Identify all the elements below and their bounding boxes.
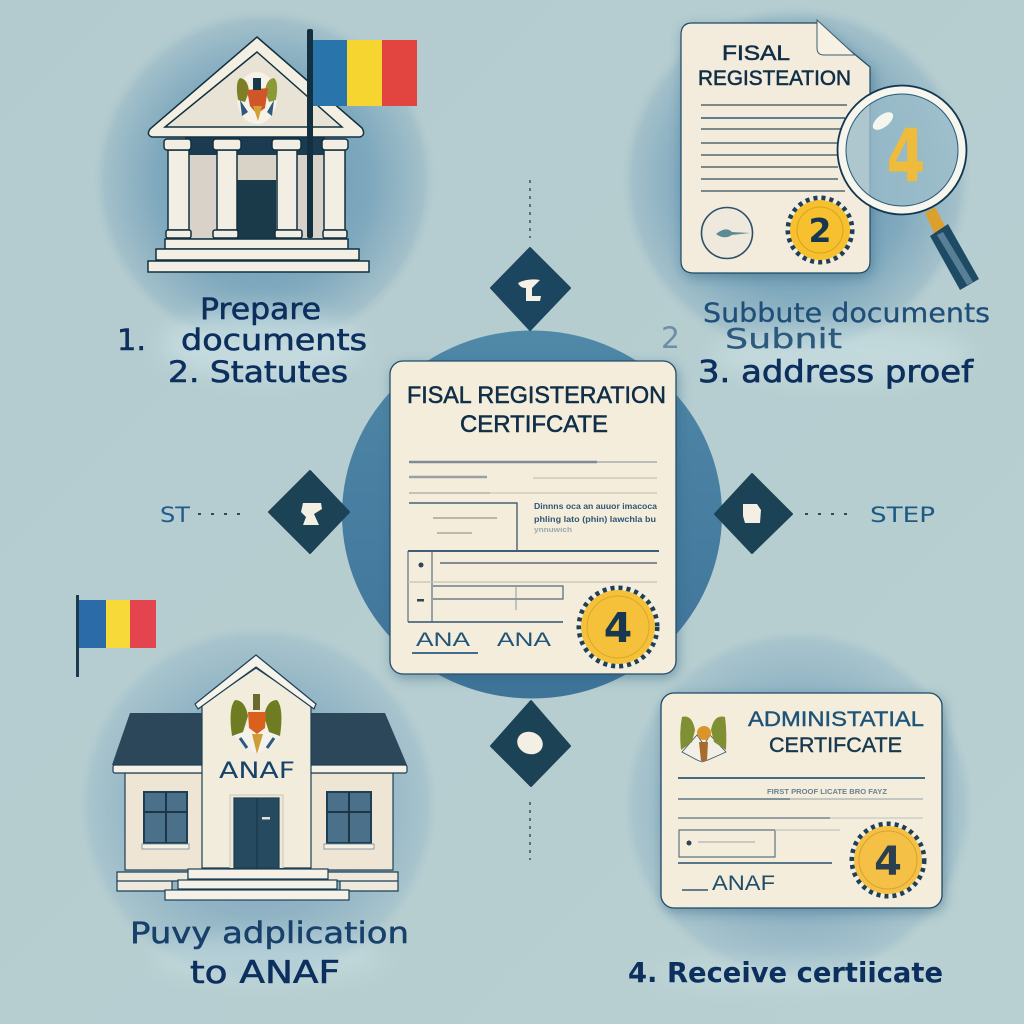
left eave bbox=[113, 765, 203, 773]
building sign: ANAF bbox=[219, 759, 295, 784]
seal: number 2: 2 bbox=[809, 211, 831, 250]
label: step 1: 2. Statutes bbox=[168, 355, 348, 389]
form marker bbox=[686, 840, 692, 846]
connector: top dashed bbox=[529, 180, 531, 238]
stamp circle bbox=[702, 208, 752, 258]
side plinths bbox=[117, 872, 398, 891]
diamond: right step bbox=[715, 474, 792, 553]
diamond: top step bbox=[491, 248, 570, 330]
right window bbox=[324, 792, 374, 849]
label: step 1: 1. bbox=[117, 323, 146, 357]
label: step 2: 3. address proef bbox=[698, 355, 975, 390]
text glow: step 1 bbox=[162, 311, 362, 379]
fine print: FIRST PROOF LICATE BRO FAYZ bbox=[767, 789, 888, 796]
form markers bbox=[417, 562, 424, 602]
panel: step 4 administrative certificate bbox=[661, 693, 942, 908]
document title bbox=[698, 42, 851, 90]
signature 1: ANA bbox=[416, 630, 470, 651]
card title: ADMINISTATIAL bbox=[748, 708, 924, 731]
icon: magnifying glass bbox=[838, 86, 979, 290]
flag: step 1 bbox=[307, 29, 417, 238]
label: step 1: documents bbox=[181, 323, 367, 357]
central block bbox=[202, 668, 311, 868]
panel: step 3 ANAF building bbox=[112, 655, 407, 900]
left roof bbox=[112, 713, 202, 765]
document title: FISAL bbox=[722, 42, 790, 65]
diamond: left step bbox=[269, 471, 349, 553]
seal: number 4: 4 bbox=[604, 604, 632, 652]
connector: left dashed bbox=[198, 513, 250, 515]
card bbox=[661, 693, 942, 908]
label: step 3 bbox=[130, 916, 409, 991]
fine print: Dinnns oca an auuor imacoca bbox=[534, 501, 657, 511]
certificate sheet bbox=[390, 361, 676, 674]
page fold bbox=[817, 20, 855, 55]
left window bbox=[142, 792, 189, 849]
magnifier lens bbox=[842, 90, 962, 210]
label: ST: ST bbox=[160, 503, 190, 527]
column 4 bbox=[322, 139, 348, 238]
certificate title bbox=[407, 382, 666, 438]
emblem: coat of arms bbox=[680, 717, 726, 762]
label: step 2: Subnit bbox=[725, 322, 842, 355]
certificate form lines bbox=[408, 462, 659, 653]
seal: number 2 bbox=[788, 198, 852, 262]
door lintel bbox=[237, 155, 276, 180]
column 1 bbox=[164, 139, 191, 238]
document lines bbox=[701, 105, 847, 191]
card title: CERTIFCATE bbox=[769, 734, 902, 757]
pediment inner bbox=[165, 52, 342, 127]
label: step 1: Prepare bbox=[200, 292, 321, 326]
text glow: step 2 bbox=[710, 327, 970, 383]
right eave bbox=[310, 765, 407, 773]
step 4 halo bbox=[622, 629, 974, 981]
panel: step 1 government building bbox=[148, 37, 369, 272]
text glow: step 4 bbox=[650, 961, 930, 989]
lens rim bbox=[838, 86, 966, 214]
back wall bbox=[189, 137, 324, 238]
document sheet bbox=[681, 23, 870, 273]
right roof bbox=[311, 713, 407, 765]
flag: step 3 bbox=[76, 595, 156, 677]
lens highlight bbox=[870, 109, 896, 133]
emblem: pediment coat of arms bbox=[237, 72, 277, 124]
step 3 halo bbox=[78, 625, 438, 985]
label: step 2: 2 bbox=[661, 321, 680, 355]
connector: right dashed bbox=[805, 513, 852, 515]
dark frieze bbox=[185, 137, 325, 155]
seal: number 4: 4 bbox=[874, 839, 902, 885]
panel: central certificate bbox=[390, 361, 676, 674]
emblem: coat of arms bbox=[231, 694, 281, 754]
connector: bottom dashed bbox=[529, 802, 531, 860]
signature: ANAF bbox=[712, 872, 775, 895]
diamond: bottom step bbox=[491, 701, 570, 786]
card form lines bbox=[678, 778, 925, 890]
document title: REGISTEATION bbox=[698, 67, 851, 90]
side walls bbox=[125, 773, 393, 870]
text glow: step 3 bbox=[153, 934, 383, 982]
magnifier handle bbox=[925, 207, 979, 290]
signature 2: ANA bbox=[497, 630, 551, 651]
door bbox=[230, 795, 283, 868]
fine print: phling lato (phin) lawchla bu bbox=[534, 514, 656, 524]
column 3 bbox=[272, 139, 302, 238]
steps bbox=[148, 239, 369, 272]
lens number: 4 bbox=[887, 115, 925, 199]
label: step 3: Puvy adplication bbox=[130, 916, 409, 950]
seal: number 4 bbox=[852, 824, 924, 896]
label: step 3: to ANAF bbox=[190, 955, 340, 991]
step 2 halo bbox=[620, 4, 972, 356]
label: step 4: 4. Receive certiicate bbox=[628, 956, 943, 989]
label: step 2: Subbute documents bbox=[703, 298, 990, 329]
gable roof trim bbox=[195, 655, 316, 709]
column 2 bbox=[213, 139, 241, 238]
lens inner rim bbox=[846, 94, 958, 206]
step 1 halo bbox=[92, 8, 436, 352]
fine print bbox=[534, 501, 657, 534]
label: step 1 bbox=[117, 292, 367, 389]
certificate title: CERTIFCATE bbox=[460, 411, 608, 438]
door bbox=[237, 180, 276, 240]
seal: number 4 bbox=[579, 588, 657, 666]
central disc bbox=[342, 330, 722, 698]
card title bbox=[748, 708, 924, 757]
label: STEP: STEP bbox=[870, 503, 935, 527]
certificate title: FISAL REGISTERATION bbox=[407, 382, 666, 409]
panel: step 2 document bbox=[681, 20, 870, 273]
entrance steps bbox=[165, 869, 349, 900]
label: step 2 bbox=[661, 298, 990, 390]
fine print: ynnuwich bbox=[534, 527, 572, 534]
pediment bbox=[148, 37, 364, 137]
